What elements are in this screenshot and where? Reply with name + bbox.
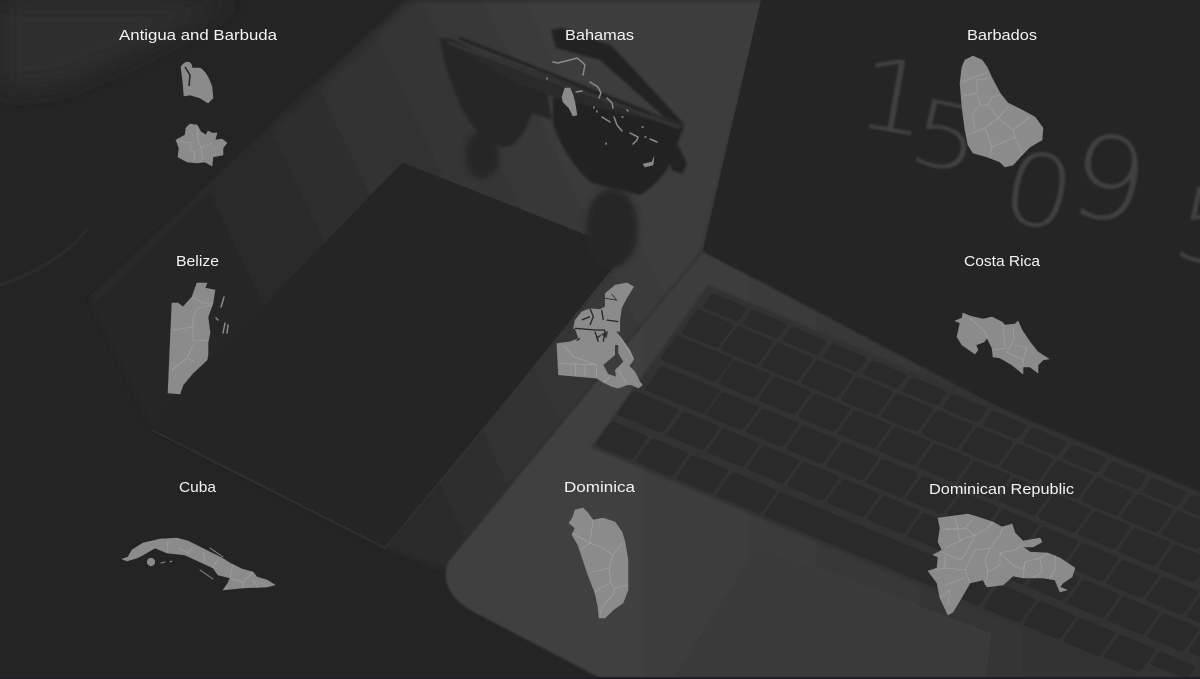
trackpad [672, 545, 990, 679]
map: Dominican Republic [928, 514, 1075, 615]
map: Belize [168, 283, 228, 394]
heading: Bahamas: Bahamas [565, 27, 634, 44]
heading: Antigua and Barbuda: Antigua and Barbuda [119, 27, 278, 44]
keyboard [594, 290, 1200, 679]
heading: Dominica: Dominica [564, 479, 636, 496]
panel: Costa Rica [955, 253, 1049, 374]
panel: Canada [557, 283, 643, 388]
clock digits on the screen [848, 35, 1200, 292]
sunglasses shadows [465, 131, 638, 268]
sunglasses [440, 28, 687, 195]
heading: Cuba: Cuba [179, 479, 217, 496]
panel: Belize [168, 253, 228, 394]
camera strap curve [0, 228, 88, 285]
map: Costa Rica [955, 313, 1049, 374]
heading: Belize: Belize [176, 253, 219, 270]
panel: Dominica [564, 479, 636, 618]
camera at top left [0, 0, 235, 90]
laptop screen [703, 0, 1200, 516]
clock digits on the screen: 0 [992, 127, 1085, 256]
heading: Dominican Republic: Dominican Republic [929, 481, 1075, 498]
clock digits on the screen: 5 [901, 79, 991, 196]
map: Antigua [176, 124, 227, 166]
panel: Barbados [960, 27, 1043, 167]
map: Canada [557, 283, 643, 388]
panel: Bahamas [547, 27, 657, 167]
laptop base [446, 252, 1200, 679]
tablet [152, 166, 626, 548]
map: Barbados [960, 56, 1043, 167]
map: Cuba [122, 538, 275, 590]
clock digits on the screen: 9 [1059, 107, 1158, 252]
map: Dominica [569, 508, 628, 618]
heading: Costa Rica: Costa Rica [964, 253, 1041, 270]
keyboard well [591, 285, 1200, 679]
map: Barbuda [181, 62, 213, 103]
panel: Cuba [122, 479, 275, 590]
panel: Dominican Republic [928, 481, 1075, 615]
folder edge [92, 0, 410, 300]
Hudson Bay [603, 345, 623, 377]
heading: Barbados: Barbados [967, 27, 1037, 44]
desk surface [90, 0, 765, 570]
clock digits on the screen: 1 [848, 35, 940, 161]
map: Bahamas [547, 58, 657, 167]
panel: Antigua and Barbuda [119, 27, 278, 166]
